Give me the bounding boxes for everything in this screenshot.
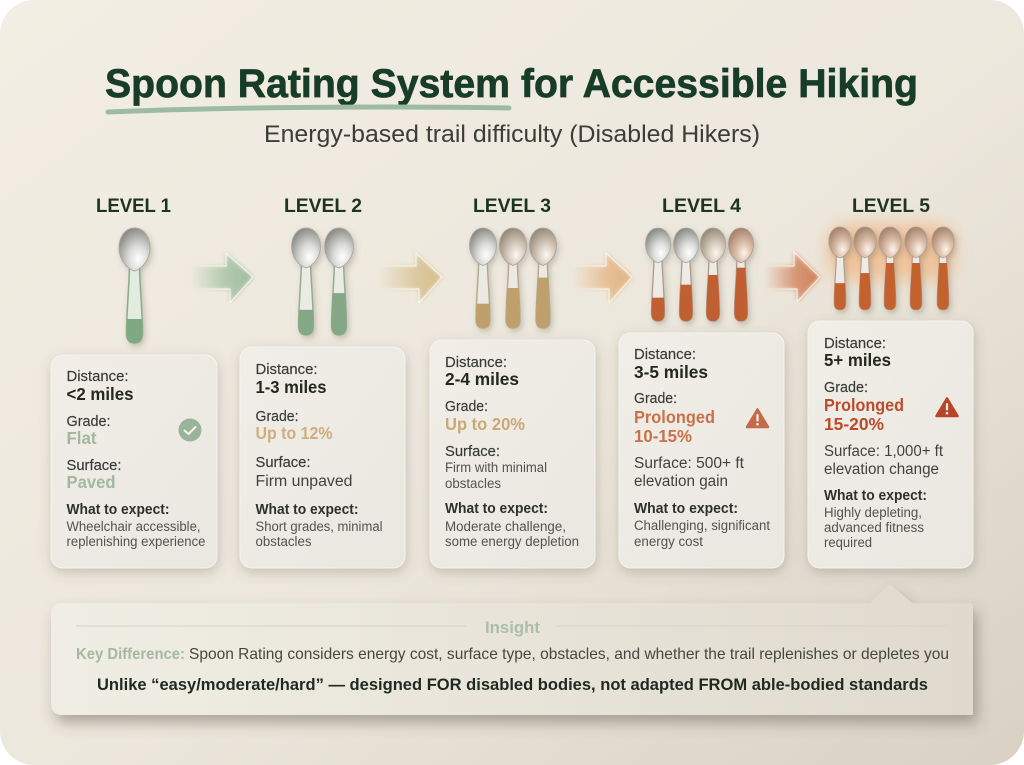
panel: level 1 card: Wheelchair accessible, [66, 519, 200, 534]
panel: level 1 card: Distance: [66, 368, 128, 385]
panel: level 5 card: What to expect: [824, 488, 927, 504]
panel: level 3 card: Surface: [445, 443, 500, 460]
subtitle: Energy-based trail difficulty (Disabled Hikers) [264, 121, 760, 148]
panel: level 5 card: 5+ miles [824, 350, 891, 370]
panel: level 4 card: 10-15% [634, 426, 692, 446]
panel: level 5 card: elevation change [824, 461, 939, 478]
arrow: level 1 to 2 [190, 253, 253, 303]
panel: level 3 card: Moderate challenge, [445, 519, 566, 534]
panel: level 5 card: Prolonged [824, 395, 904, 415]
icon: warning triangle [936, 398, 958, 416]
arrow: level 4 to 5 [764, 252, 820, 302]
panel: level 5 card: Highly depleting, [824, 505, 922, 520]
key difference description: Spoon Rating considers energy cost, surface type, obstacles, and whether the trail replenishes or depletes you [189, 646, 949, 663]
panel: level 3 card: obstacles [445, 476, 501, 491]
panel: level 3 card: some energy depletion [445, 534, 579, 549]
panel: level 4 card [619, 333, 784, 568]
icon: four spoons, level 4 [645, 228, 754, 323]
panel: level 1 card: Flat [66, 428, 97, 448]
bold statement: Unlike “easy/moderate/hard” — designed FOR disabled bodies, not adapted FROM able-bodied standards [97, 676, 928, 694]
panel: level 2 card: What to expect: [256, 502, 358, 518]
level 4 heading: LEVEL 4 [662, 195, 741, 217]
panel: level 5 card: Distance: [824, 335, 886, 352]
panel: level 2 card: Distance: [256, 361, 318, 378]
panel: level 2 card: Firm unpaved [256, 473, 352, 490]
panel: level 2 card: Grade: [256, 408, 298, 425]
icon: two spoons, level 2 [292, 228, 353, 337]
insight heading: Insight [485, 618, 540, 637]
panel: level 5 card: advanced fitness [824, 520, 924, 535]
panel: level 2 card: Up to 12% [256, 423, 333, 443]
panel: level 4 card: Surface: 500+ ft [634, 455, 745, 472]
panel: level 4 card: Prolonged [634, 407, 715, 427]
panel: level 3 card: Grade: [445, 398, 488, 415]
panel: level 2 card: obstacles [256, 534, 312, 549]
panel: level 3 card: What to expect: [445, 501, 548, 517]
level 5 glow [828, 224, 954, 280]
panel: level 4 card: Grade: [634, 390, 677, 407]
icon: check badge [178, 418, 202, 442]
panel: level 1 card: <2 miles [66, 384, 134, 404]
arrow: level 2 to 3 [378, 253, 442, 303]
panel: level 3 card [430, 340, 595, 568]
panel: level 5 card: Grade: [824, 379, 868, 396]
panel: level 3 card: 2-4 miles [445, 369, 519, 389]
panel: level 2 card [240, 347, 405, 568]
panel: level 5 card: required [824, 535, 872, 550]
title: Spoon Rating System for Accessible Hiking [105, 62, 918, 106]
panel: level 2 card: Surface: [256, 454, 310, 471]
panel: level 1 card: Paved [66, 472, 116, 492]
panel: level 3 card: Distance: [445, 354, 507, 371]
icon: five spoons, level 5 [829, 227, 954, 311]
panel: level 2 card: Short grades, minimal [256, 519, 382, 534]
panel: level 1 card: replenishing experience [66, 534, 206, 549]
panel: level 2 card: 1-3 miles [256, 377, 327, 397]
level 5 heading: LEVEL 5 [852, 195, 930, 217]
icon: three spoons, level 3 [470, 228, 556, 330]
title underline brush stroke [108, 107, 509, 112]
panel: level 5 card [808, 321, 973, 568]
level 3 heading: LEVEL 3 [473, 195, 551, 217]
key difference label: Key Difference: [76, 646, 185, 663]
icon: warning triangle [747, 410, 768, 427]
panel: level 4 card: energy cost [634, 534, 703, 549]
panel: level 1 card [51, 355, 217, 568]
panel: level 3 card: Firm with minimal [445, 460, 547, 475]
icon: one spoon, level 1 [119, 228, 150, 345]
panel: level 1 card: Grade: [66, 413, 110, 430]
panel: level 3 card: Up to 20% [445, 414, 525, 434]
panel: level 1 card: What to expect: [66, 502, 170, 518]
panel: level 1 card: Surface: [66, 457, 122, 474]
panel: level 4 card: What to expect: [634, 501, 738, 517]
level 2 heading: LEVEL 2 [284, 195, 362, 217]
panel: level 4 card: 3-5 miles [634, 362, 708, 382]
panel: insight callout [51, 584, 973, 715]
arrow: level 3 to 4 [572, 253, 632, 303]
panel: level 4 card: Distance: [634, 346, 696, 363]
panel: level 5 card: Surface: 1,000+ ft [824, 443, 944, 460]
level 1 heading: LEVEL 1 [96, 195, 171, 217]
panel: level 4 card: elevation gain [634, 473, 728, 490]
panel: level 4 card: Challenging, significant [634, 518, 770, 533]
panel: level 5 card: 15-20% [824, 414, 884, 434]
